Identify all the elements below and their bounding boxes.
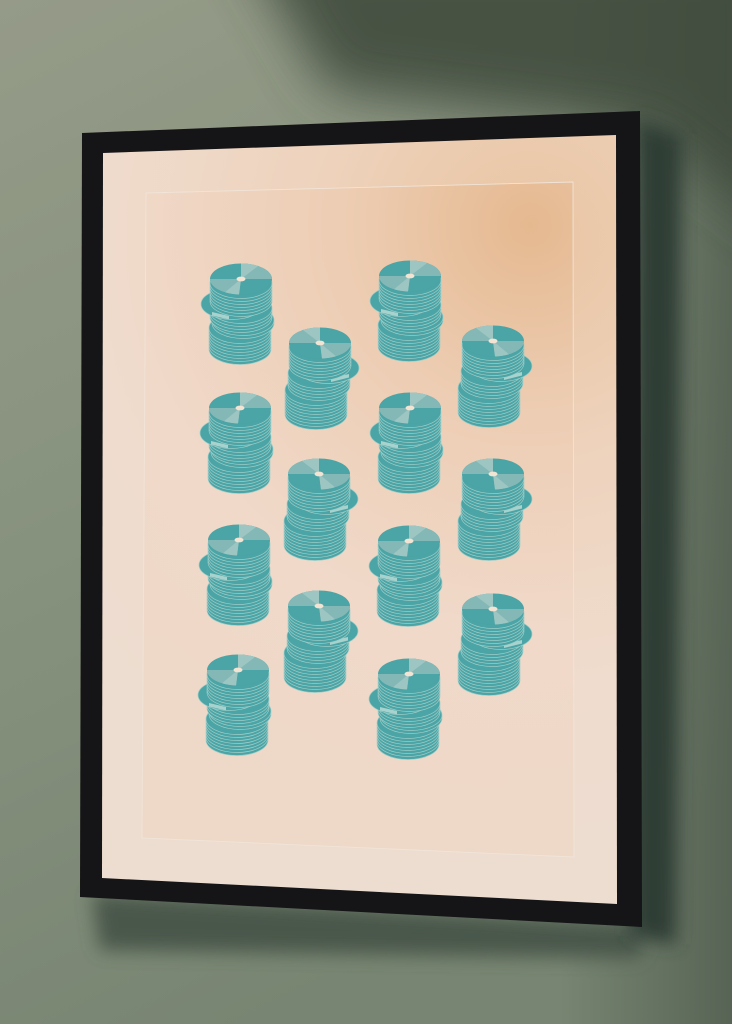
CD stack column 3, row 3 <box>369 525 442 626</box>
mat board <box>102 135 617 904</box>
wall shadow below frame <box>92 893 645 958</box>
CD stack column 1, row 1 <box>201 263 274 364</box>
CD stack column 1, row 4 <box>198 654 271 756</box>
CD stack column 2, row 2 <box>284 458 358 560</box>
CD stack column 2, row 3 <box>284 590 358 692</box>
CD stack column 2, row 1 <box>285 327 359 430</box>
CD stack column 4, row 1 <box>458 325 532 428</box>
artwork window <box>142 182 574 857</box>
wall shadow right of frame <box>630 118 682 945</box>
CD stack column 3, row 4 <box>369 658 442 760</box>
CD stacks group <box>198 260 532 760</box>
CD stack column 3, row 1 <box>370 260 443 362</box>
CD stack column 1, row 3 <box>199 524 272 626</box>
wall shadow from above <box>240 0 732 240</box>
CD stack column 4, row 3 <box>458 593 532 696</box>
wall darkening on the right <box>560 0 732 1024</box>
CD stack column 4, row 2 <box>458 458 532 560</box>
CD stack column 3, row 2 <box>370 392 443 494</box>
picture frame <box>80 111 642 927</box>
CD stack column 1, row 2 <box>200 392 273 494</box>
